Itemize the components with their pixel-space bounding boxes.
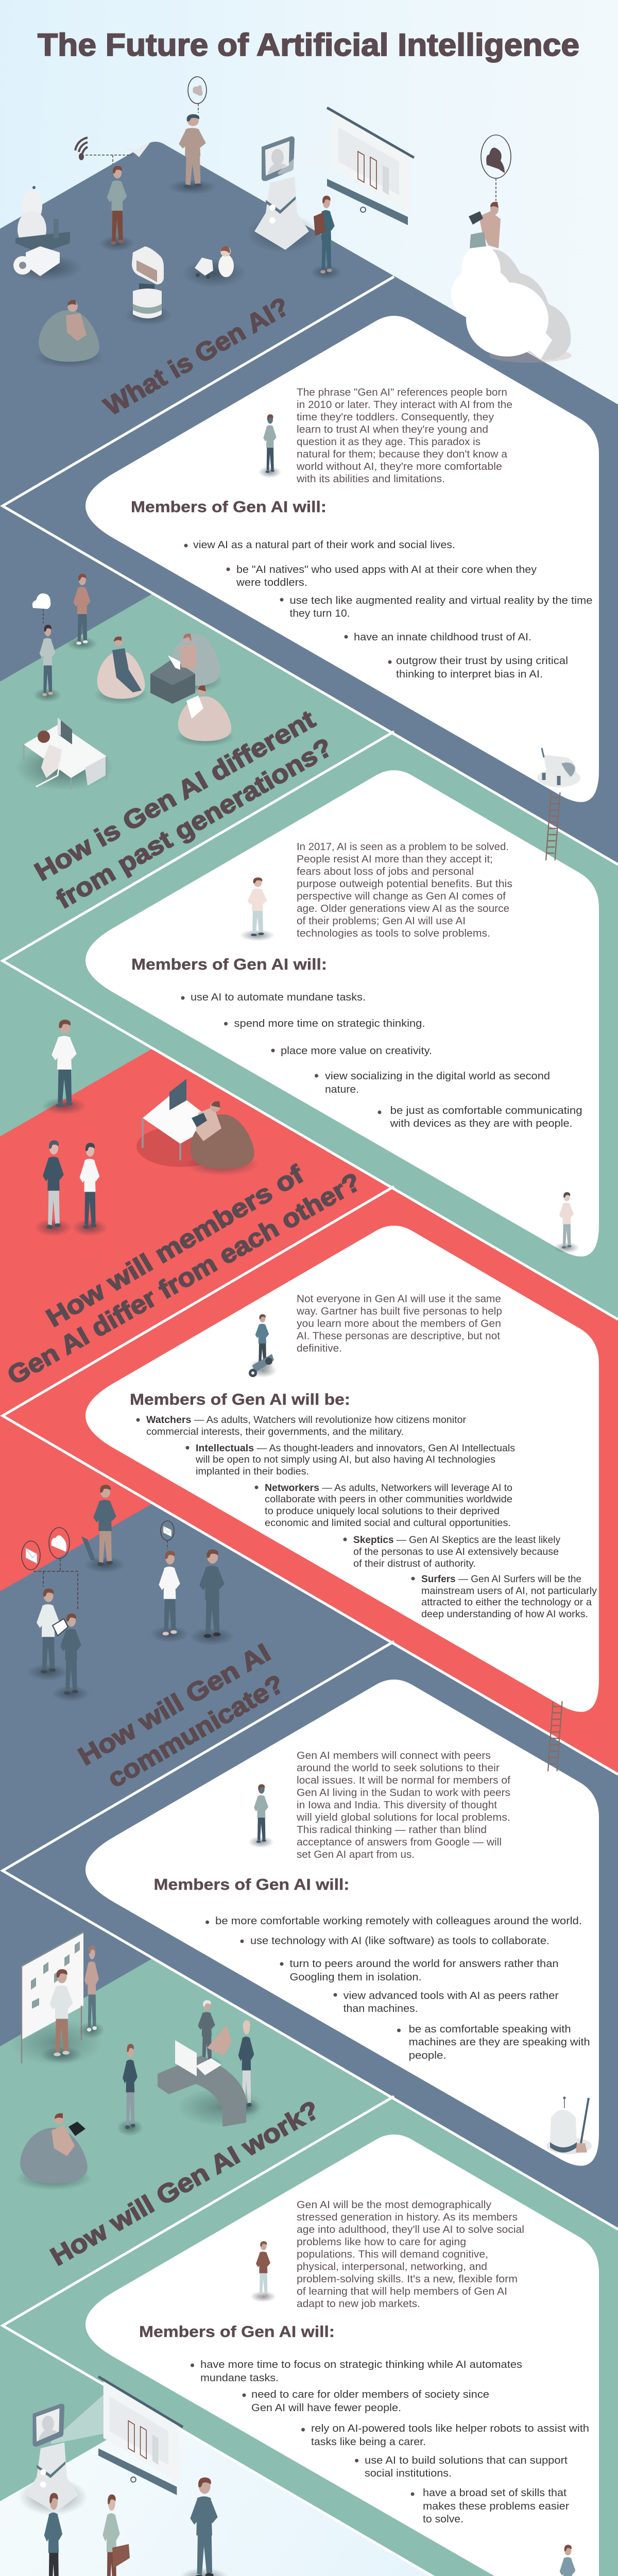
heading: how will Gen AI communicate xyxy=(73,1638,289,1793)
panel 4 subheading: Members of Gen AI will: xyxy=(153,1875,349,1893)
panel 3 persona list: will be open to not simply using AI, but also having AI technologies xyxy=(195,1454,495,1465)
panel 4 bullet list: be as comfortable speaking with xyxy=(409,2023,571,2035)
panel 3 persona list: to produce uniquely local solutions to their deprived xyxy=(265,1505,500,1517)
illustration: robot with wine table xyxy=(10,186,82,281)
panel 5 bullet list: Gen AI will have fewer people. xyxy=(251,2402,401,2414)
panel 5 bullet list: mundane tasks. xyxy=(200,2372,279,2384)
panel: communicate xyxy=(85,1680,599,2166)
panel 5 bullet list: makes these problems easier xyxy=(423,2500,569,2512)
panel 2 bullet list: view socializing in the digital world as second xyxy=(325,1070,550,1082)
illustration: kiosk robot in presentation xyxy=(19,2404,88,2516)
panel 3 persona list: economic and limited social and cultural opportunities. xyxy=(265,1517,511,1529)
illustration: man in bean bag chair xyxy=(35,300,104,368)
panel 5 bullet list: have a broad set of skills that xyxy=(423,2487,566,2499)
panel 2 bullet list: with devices as they are with people. xyxy=(390,1117,573,1129)
illustration: lounge with bean bags and cube table xyxy=(94,633,235,747)
heading: how will Gen AI communicate: How will Gen AI xyxy=(73,1638,275,1771)
tile: closing section background xyxy=(0,2414,618,2576)
panel 2 bullet list xyxy=(181,991,582,1129)
illustration: man walking xyxy=(42,1020,87,1114)
panel 5 bullet list xyxy=(191,2359,589,2525)
panel 1 bullet list: thinking to interpret bias in AI. xyxy=(396,668,543,680)
panel 4 intro text: set Gen AI apart from us. xyxy=(297,1849,415,1860)
illustration: robot dog xyxy=(537,748,580,787)
illustration: projection screen in presentation xyxy=(51,2377,183,2495)
panel 3 intro text: Not everyone in Gen AI will use it the same xyxy=(297,1293,501,1304)
illustration: team around standing desk xyxy=(158,2000,265,2127)
heading: how is Gen AI different: from past generations? xyxy=(52,733,337,914)
illustration: kiosk robot xyxy=(247,137,319,253)
title: The Future of Artificial Intelligence xyxy=(38,27,579,62)
panel 4 bullet list: Googling them in isolation. xyxy=(289,1971,421,1983)
panel 2 intro text: technologies as tools to solve problems. xyxy=(297,927,490,939)
panel 1 bullet list xyxy=(184,539,592,680)
panel 3 figure: man on hoverboard xyxy=(248,1314,277,1378)
illustration: man at desk in bean bag xyxy=(136,1079,259,1176)
illustration: message icons with connector xyxy=(22,1528,78,1611)
panel 3 persona list: implanted in their bodies. xyxy=(196,1466,309,1477)
panel: personas xyxy=(85,1226,599,1712)
panel 1 intro text: The phrase "Gen AI" references people born xyxy=(297,386,507,398)
illustration: wifi, drone and man with laptop xyxy=(75,138,150,251)
panel 4 intro text: around the world to seek solutions to their xyxy=(297,1762,500,1774)
panel 1 intro text: learn to trust AI when they're young and xyxy=(297,423,488,435)
panel 5 intro text: Gen AI will be the most demographically xyxy=(297,2199,492,2211)
panel 3 persona list: of the personas to use AI extensively because xyxy=(353,1546,559,1557)
panel 5 subheading: Members of Gen AI will: xyxy=(139,2323,335,2341)
panel 4 bullet list: use technology with AI (like software) as tools to collaborate. xyxy=(250,1935,550,1946)
panel 3 persona list: collaborate with peers in other communities worldwide xyxy=(265,1494,512,1505)
panel 5 bullet list: use AI to build solutions that can support xyxy=(365,2454,568,2466)
panel 5 intro text: stressed generation in history. As its members xyxy=(297,2211,518,2223)
illustration: woman seen from behind xyxy=(117,2044,143,2136)
tile: how will members differ xyxy=(0,1049,618,1803)
panel 5 figure: man on phone xyxy=(553,2545,582,2576)
panel 3 persona list: Skeptics — Gen AI Skeptics are the least likely xyxy=(353,1534,560,1546)
panel 5 intro text: age into adulthood, they'll use AI to solve social xyxy=(297,2224,524,2235)
heading: how will members differ: How will members of xyxy=(41,1160,308,1332)
panel 4 intro text: will yield global solutions for local problems. xyxy=(296,1811,510,1823)
panel 3 persona list xyxy=(136,1414,597,1620)
illustration: man in dark suit with tablet xyxy=(52,1614,90,1702)
heading: what is Gen AI: What is Gen AI? xyxy=(99,292,294,421)
panel 2 figure: woman holding phone xyxy=(239,877,275,941)
illustration: woman with phone and cloud icon xyxy=(32,594,62,702)
illustration: woman with email icon xyxy=(150,1521,188,1642)
panel 5 intro text: adapt to new job markets. xyxy=(297,2298,420,2310)
panel 5 bullet list: have more time to focus on strategic thinking while AI automates xyxy=(200,2359,522,2370)
panel 4 intro text: Gen AI members will connect with peers xyxy=(297,1750,491,1761)
illustration: projection screen xyxy=(278,108,414,225)
panel 5 bullet list: need to care for older members of society since xyxy=(251,2388,489,2400)
panel 2 intro text: of their problems; Gen AI will use AI xyxy=(297,915,466,927)
panel 1 intro text: question it as they age. This paradox is xyxy=(297,436,480,448)
panel 2 bullet list: place more value on creativity. xyxy=(281,1045,432,1057)
illustration: telepresence robot xyxy=(125,246,172,326)
panel 4 bullet list: turn to peers around the world for answers rather than xyxy=(289,1958,558,1970)
panel 1 intro text: with its abilities and limitations. xyxy=(296,473,445,485)
panel 2 intro text: People resist AI more than they accept it; xyxy=(297,853,493,865)
illustration: ladder xyxy=(546,792,560,860)
panel 2 intro text: In 2017, AI is seen as a problem to be solved. xyxy=(297,841,509,853)
illustration: presenter in suit xyxy=(179,2478,229,2576)
panel 4 figure: cleaning robot xyxy=(546,2097,592,2154)
panel 5 intro text: populations. This will demand cognitive, xyxy=(297,2248,488,2260)
tile: how will Gen AI work xyxy=(0,1959,618,2576)
panel 4 intro text xyxy=(296,1750,510,1860)
panel 5 intro text xyxy=(297,2199,524,2310)
panel 1 intro text: natural for them; because they don't know a xyxy=(297,448,508,460)
illustration: two women talking xyxy=(35,1140,108,1236)
illustration: woman with briefcase xyxy=(96,2495,130,2576)
illustration: bearded man in suit xyxy=(190,1549,234,1646)
panel 5 figure: woman walking xyxy=(250,2241,276,2302)
panel 1 bullet list: were toddlers. xyxy=(236,577,307,588)
panel 4 intro text: Gen AI living in the Sudan to work with peers xyxy=(297,1787,510,1799)
illustration: man on phone with tablet xyxy=(81,1485,126,1573)
panel 2 intro text: fears about loss of jobs and personal xyxy=(297,866,474,877)
panel 2 bullet list: nature. xyxy=(325,1083,359,1095)
panel 3 intro text: way. Gartner has built five personas to help xyxy=(296,1306,502,1317)
panel 4 intro text: local issues. It will be normal for members of xyxy=(297,1774,510,1786)
panel 1 bullet list: be "AI natives" who used apps with AI at their core when they xyxy=(236,564,537,575)
panel 5 bullet list: rely on AI-powered tools like helper robots to assist with xyxy=(311,2422,589,2434)
illustration: person with backpack xyxy=(311,196,341,280)
panel 2 intro text: perspective will change as Gen AI comes of xyxy=(297,890,506,902)
panel 4 bullet list: view advanced tools with AI as peers rather xyxy=(344,1990,559,2002)
panel 2 intro text: age. Older generations view AI as the source xyxy=(297,903,509,914)
panel 2 intro text: purpose outweigh potential benefits. But this xyxy=(297,878,512,890)
panel: what is Gen AI xyxy=(85,316,599,802)
panel 4 bullet list xyxy=(205,1915,590,2061)
panel 1 bullet list: they turn 10. xyxy=(289,607,350,619)
illustration: woman with cloud icon xyxy=(168,77,217,194)
heading: how is Gen AI different xyxy=(30,704,337,914)
panel 4 figure: woman in VR xyxy=(248,1784,274,1848)
panel: how different xyxy=(85,770,599,1257)
panel 1 bullet list: use tech like augmented reality and virtual reality by the time xyxy=(289,595,592,606)
panel 3 persona list: Surfers — Gen AI Surfers will be the xyxy=(421,1573,581,1585)
panel 3 intro text: AI. These personas are descriptive, but not xyxy=(297,1330,500,1342)
panel 3 persona list: Watchers — As adults, Watchers will revolutionize how citizens monitor xyxy=(146,1414,466,1426)
heading: how will Gen AI work: How will Gen AI work? xyxy=(46,2095,324,2272)
tile: what is Gen AI xyxy=(0,142,618,876)
illustration: woman in VR headset xyxy=(66,574,97,651)
panel 2 subheading: Members of Gen AI will: xyxy=(131,955,327,973)
panel 5 intro text: of learning that will help members of Gen AI xyxy=(297,2285,507,2297)
panel 2 bullet list: spend more time on strategic thinking. xyxy=(234,1018,425,1029)
panel 4 bullet list: people. xyxy=(409,2049,447,2061)
heading: how is Gen AI different: How is Gen AI different xyxy=(30,704,320,887)
panel 5 bullet list: tasks like being a carer. xyxy=(311,2436,426,2448)
panel 1 subheading: Members of Gen AI will: xyxy=(131,498,327,516)
panel 4 intro text: in Iowa and India. This diversity of thought xyxy=(297,1799,497,1811)
panel 5 bullet list: social institutions. xyxy=(365,2467,452,2479)
panel 1 bullet list: have an innate childhood trust of AI. xyxy=(354,631,531,643)
panel 1 bullet list: outgrow their trust by using critical xyxy=(396,655,568,667)
panel 3 persona list: mainstream users of AI, not particularly xyxy=(421,1585,597,1597)
panel 1 intro text: world without AI, they're more comfortable xyxy=(296,461,502,472)
illustration: man in white jacket xyxy=(27,1588,68,1681)
heading: how will Gen AI communicate: communicate? xyxy=(103,1669,289,1793)
tile: how will Gen AI communicate xyxy=(0,1504,618,2267)
illustration: man seen from behind xyxy=(37,2493,70,2576)
panel 4 bullet list: machines are they are speaking with xyxy=(409,2036,590,2048)
panel 3 persona list: of their distrust of authority. xyxy=(353,1558,476,1569)
panel 2 intro text xyxy=(297,841,512,939)
panel: work xyxy=(85,2134,599,2576)
panel 4 intro text: acceptance of answers from Google — will xyxy=(297,1836,502,1848)
panel 5 intro text: problems like how to care for aging xyxy=(297,2236,466,2248)
illustration: cloud with reader xyxy=(451,135,572,363)
heading: how will members differ: Gen AI differ from each other? xyxy=(3,1167,366,1391)
panel 1 intro text xyxy=(296,386,512,485)
panel 3 persona list: Intellectuals — As thought-leaders and innovators, Gen AI Intellectuals xyxy=(196,1443,515,1454)
panel 4 bullet list: than machines. xyxy=(344,2003,418,2014)
panel 2 bullet list: use AI to automate mundane tasks. xyxy=(191,991,366,1003)
panel 3 subheading: Members of Gen AI will be: xyxy=(130,1390,350,1409)
panel 5 bullet list: to solve. xyxy=(423,2513,464,2525)
illustration: man in bean bag with tablet xyxy=(15,2113,92,2190)
panel 2 figure: woman with headset xyxy=(554,1192,579,1253)
panel 3 intro text xyxy=(296,1293,502,1354)
panel 3 intro text: definitive. xyxy=(297,1343,342,1354)
illustration: whiteboard with two colleagues xyxy=(10,1932,105,2066)
panel 5 intro text: physical, interpersonal, networking, and xyxy=(297,2261,487,2273)
panel 3 persona list: attracted to either the technology or a xyxy=(421,1597,592,1608)
panel 3 persona list: commercial interests, their governments, and the military. xyxy=(146,1426,404,1437)
panel 4 bullet list: be more comfortable working remotely with colleagues around the world. xyxy=(215,1915,582,1927)
illustration: ladder xyxy=(548,1701,562,1771)
panel 4 intro text: This radical thinking — rather than blind xyxy=(297,1824,487,1836)
panel 3 intro text: you learn more about the members of Gen xyxy=(297,1318,501,1329)
panel 2 bullet list: be just as comfortable communicating xyxy=(390,1105,582,1116)
illustration: woman at desk xyxy=(15,718,113,790)
panel 1 figure: woman with VR xyxy=(258,414,282,478)
panel 1 intro text: in 2010 or later. They interact with AI from the xyxy=(297,399,512,411)
panel 3 persona list: deep understanding of how AI works. xyxy=(421,1608,588,1620)
panel 3 persona list: Networkers — As adults, Networkers will leverage AI to xyxy=(265,1482,512,1494)
tile: how is Gen AI different xyxy=(0,594,618,1340)
panel 5 intro text: problem-solving skills. It's a new, flexible form xyxy=(297,2273,518,2285)
illustration: child and robot dog xyxy=(182,246,246,287)
panel 1 bullet list: view AI as a natural part of their work and social lives. xyxy=(193,539,455,551)
panel 1 intro text: time they're toddlers. Consequently, they xyxy=(297,411,494,423)
